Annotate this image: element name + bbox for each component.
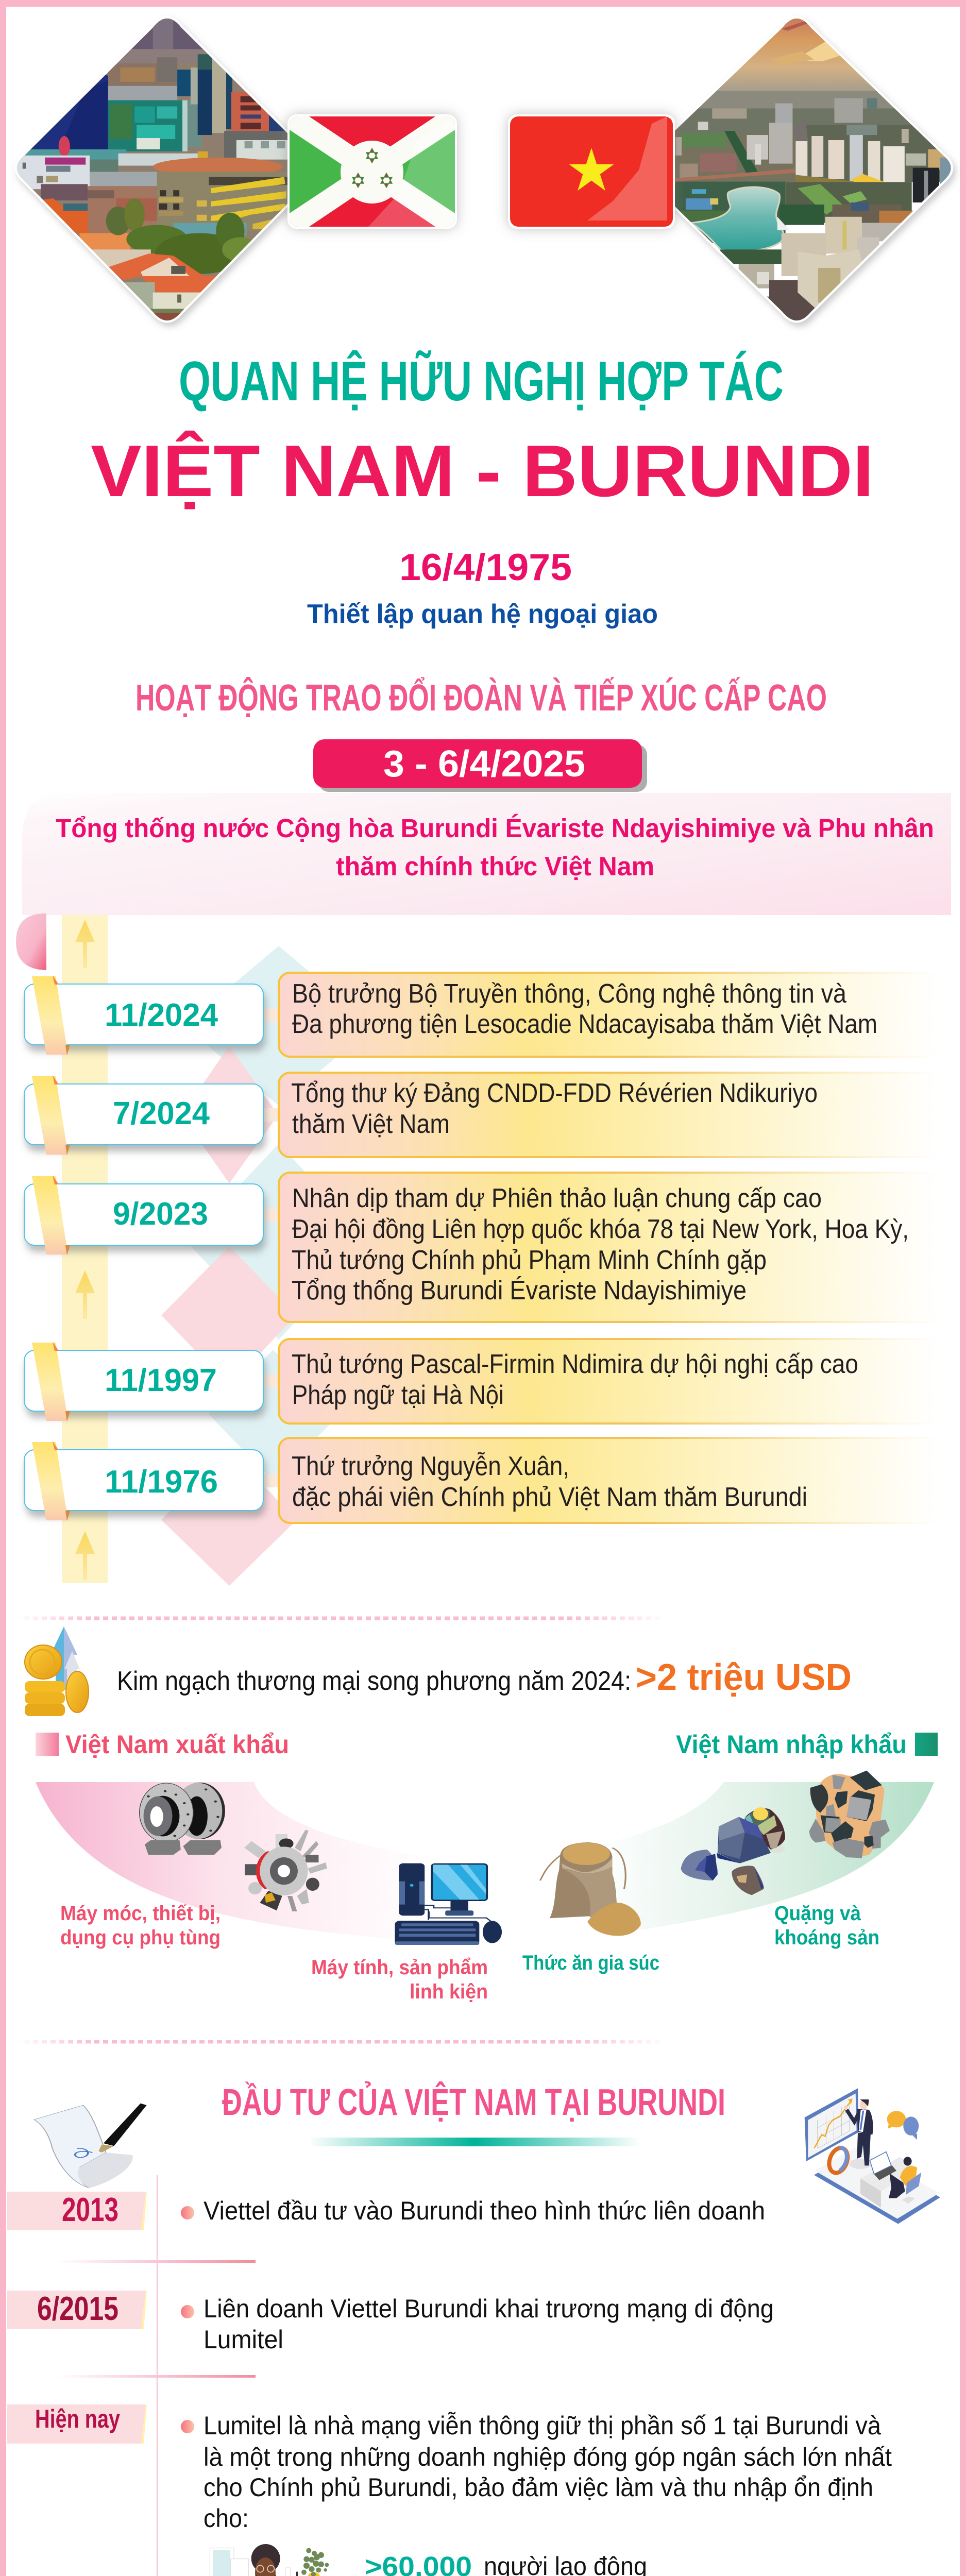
photo: Vietnam city	[675, 18, 958, 329]
timeline row: 7/2024	[24, 1073, 940, 1157]
event text	[292, 979, 877, 1039]
badge text: 3 - 6/4/2025	[383, 743, 585, 785]
icon: feed sack	[540, 1842, 641, 1936]
product label: machinery: Máy móc, thiết bị,	[60, 1902, 221, 1925]
legend: imports: Việt Nam nhập khẩu	[676, 1730, 907, 1759]
product label: ores	[774, 1902, 879, 1949]
date label: 11/1997	[105, 1363, 217, 1398]
event text: Tổng thư ký Đảng CNDD-FDD Révérien Ndikuriyo	[291, 1078, 818, 1108]
date label: 11/1976	[105, 1464, 218, 1500]
icon: desktop computer	[395, 1863, 502, 1945]
panel: presidential visit	[22, 793, 951, 915]
separator 2	[57, 2375, 256, 2378]
event text: Thủ tướng Pascal-Firmin Ndimira dự hội nghị cấp cao	[292, 1349, 858, 1379]
investment row: 6/2015	[7, 2290, 774, 2354]
arrow: timeline bottom	[75, 1531, 95, 1580]
bullet	[181, 2420, 194, 2433]
description: Liên doanh Viettel Burundi khai trương mạng di động	[204, 2294, 774, 2323]
bullet	[181, 2206, 194, 2219]
product label: computers: Máy tính, sản phẩm	[311, 1956, 488, 1979]
description	[204, 2294, 774, 2354]
date label: 9/2023	[113, 1196, 208, 1232]
date label: 7/2024	[113, 1096, 210, 1131]
separator 1	[57, 2260, 256, 2263]
background diamonds	[161, 946, 374, 1586]
icon: ore rock	[809, 1771, 890, 1858]
icon: three stars	[352, 148, 392, 188]
icon: brake discs	[140, 1783, 225, 1855]
export arc	[36, 1782, 443, 1942]
event text: Đa phương tiện Lesocadie Ndacayisaba thăm Việt Nam	[292, 1009, 877, 1039]
curl decoration	[16, 913, 46, 970]
event text: Tổng thống Burundi Évariste Ndayishimiye	[292, 1276, 747, 1306]
timeline row: 11/2024	[24, 973, 940, 1057]
icon: business analyst	[805, 2088, 940, 2224]
product label: animal feed: Thức ăn gia súc	[522, 1952, 659, 1974]
product label: computers	[311, 1956, 488, 2003]
trade label: Kim ngạch thương mại song phương năm 2024:	[117, 1666, 631, 1696]
year label: Hiện nay	[35, 2404, 120, 2433]
description: Lumitel	[204, 2325, 283, 2354]
icon: coins and arrows	[25, 1626, 89, 1716]
event text	[292, 1451, 807, 1512]
investment row: today	[7, 2404, 892, 2533]
timeline row: 11/1997	[24, 1339, 940, 1423]
icon: auto parts	[244, 1830, 327, 1911]
import arc	[592, 1782, 934, 1937]
description: Lumitel là nhà mạng viễn thông giữ thị phần số 1 tại Burundi và	[204, 2411, 881, 2440]
bullet	[181, 2305, 194, 2318]
trade value: >2 triệu USD	[636, 1657, 852, 1698]
description: cho Chính phủ Burundi, bảo đảm việc làm và thu nhập ổn định	[204, 2473, 873, 2502]
icon: signed paper and pen	[34, 2104, 147, 2188]
year label: 2013	[62, 2191, 118, 2228]
arrow: timeline top	[75, 920, 95, 968]
panel text line 1: Tổng thống nước Cộng hòa Burundi Évariste Ndayishimiye và Phu nhân	[56, 814, 934, 843]
heading: countries: VIỆT NAM - BURUNDI	[91, 430, 874, 512]
product label: ores: Quặng và	[774, 1902, 861, 1925]
investment row: 2013	[7, 2191, 765, 2230]
year label: 6/2015	[37, 2290, 118, 2327]
date: 16/4/1975	[399, 547, 572, 588]
event text: Thứ trưởng Nguyễn Xuân,	[292, 1451, 569, 1481]
icon: gemstones	[681, 1807, 785, 1895]
panel text line 2: thăm chính thức Việt Nam	[336, 852, 654, 881]
event text: đặc phái viên Chính phủ Việt Nam thăm Burundi	[292, 1482, 807, 1512]
event text: thăm Việt Nam	[292, 1109, 450, 1139]
flag: Burundi	[287, 114, 457, 229]
date caption: Thiết lập quan hệ ngoại giao	[307, 599, 658, 629]
description: Viettel đầu tư vào Burundi theo hình thức liên doanh	[204, 2196, 765, 2225]
heading underline	[308, 2138, 641, 2146]
timeline row: 9/2023	[24, 1173, 940, 1322]
flag: Vietnam	[508, 114, 675, 229]
legend: exports: Việt Nam xuất khẩu	[65, 1730, 289, 1759]
stat: workers	[365, 2551, 647, 2576]
establishment date	[307, 547, 658, 629]
event text: Bộ trưởng Bộ Truyền thông, Công nghệ thông tin và	[292, 979, 846, 1009]
event text	[291, 1078, 818, 1139]
arrow: timeline middle	[75, 1270, 95, 1319]
product label: computers: linh kiện	[410, 1980, 488, 2003]
date badge	[313, 739, 647, 792]
photo: Burundi city	[14, 18, 287, 329]
event text	[292, 1183, 909, 1306]
event text: Pháp ngữ tại Hà Nội	[292, 1380, 504, 1410]
icon: man at desk	[190, 2544, 340, 2576]
section heading: investment: ĐẦU TƯ CỦA VIỆT NAM TẠI BURUNDI	[222, 2081, 725, 2123]
description: là một trong những doanh nghiệp đóng góp ngân sách lớn nhất	[204, 2443, 892, 2471]
product label: machinery	[60, 1902, 221, 1949]
product label: ores: khoáng sản	[774, 1926, 879, 1949]
timeline band	[62, 915, 108, 1583]
date label: 11/2024	[105, 997, 218, 1033]
description	[204, 2411, 892, 2533]
timeline row: 11/1976	[24, 1438, 940, 1523]
title	[91, 350, 874, 512]
description: cho:	[204, 2504, 249, 2533]
icon: yellow star	[569, 148, 614, 191]
product label: machinery: dụng cụ phụ tùng	[60, 1926, 221, 1949]
event text	[292, 1349, 858, 1410]
event text: Thủ tướng Chính phủ Phạm Minh Chính gặp	[292, 1245, 767, 1275]
event text: Nhân dịp tham dự Phiên thảo luận chung cấp cao	[292, 1183, 822, 1213]
trade value statement	[117, 1657, 852, 1698]
